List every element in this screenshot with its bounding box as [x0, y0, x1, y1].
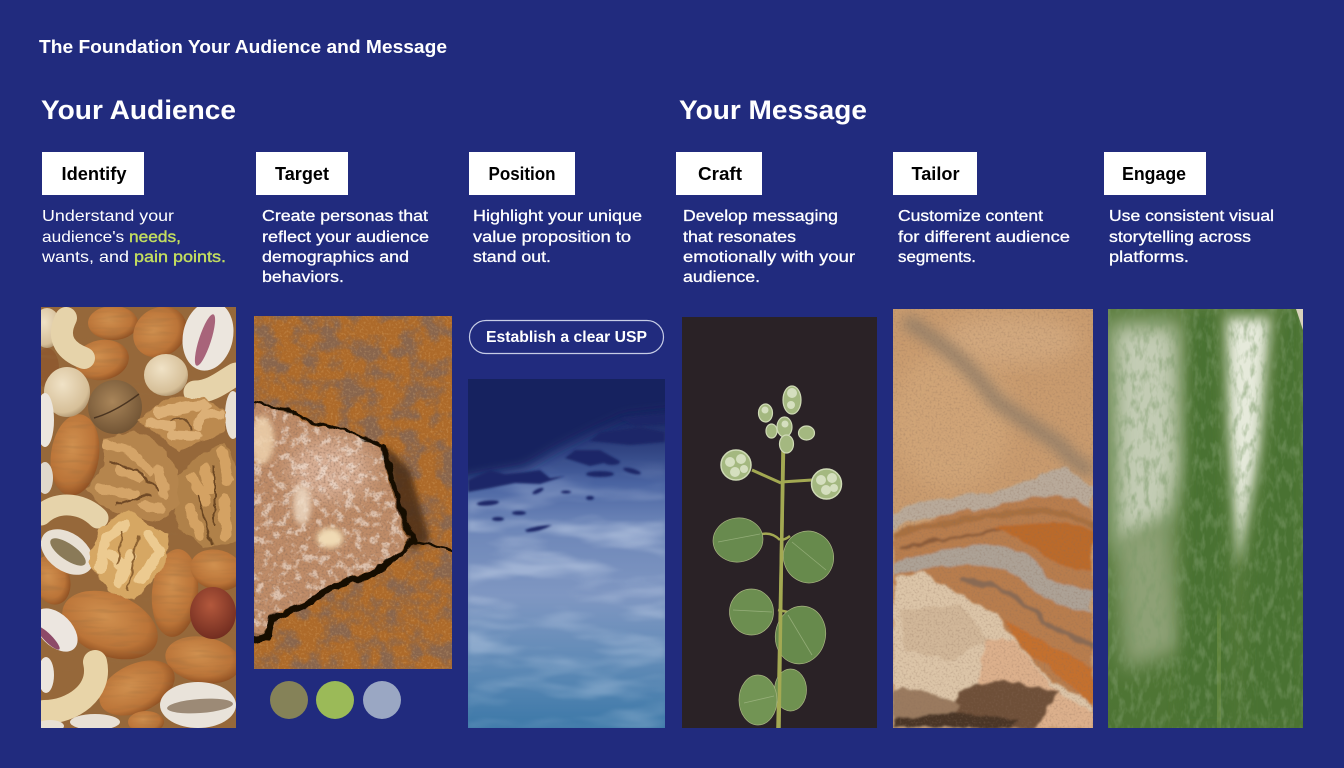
walnuts: [86, 396, 238, 600]
dark deep water: [440, 360, 700, 484]
text: target: demographics and: [262, 249, 409, 266]
leaf veins: [718, 534, 826, 703]
almond grain: [41, 307, 236, 728]
label: tailor: [893, 152, 977, 195]
text: identify: audience's needs,: [42, 229, 181, 246]
text: position: Highlight your unique: [473, 208, 642, 225]
label: identify: [42, 152, 144, 195]
text: engage: platforms.: [1109, 249, 1189, 266]
text: tailor: [898, 208, 1070, 266]
text: target: [262, 208, 429, 286]
text: engage: [1109, 208, 1274, 266]
rust texture: [254, 316, 452, 669]
image panel: leaf: [1108, 309, 1303, 728]
light ripples: [468, 379, 665, 728]
cashews: [41, 318, 236, 712]
text: craft: that resonates: [683, 229, 796, 246]
stem: [752, 450, 812, 728]
text: craft: [683, 208, 856, 286]
pale boulder: [893, 572, 1093, 728]
image panel: plant: [682, 317, 877, 728]
label: tailor: Tailor: [912, 164, 960, 184]
swatch: olive: [270, 681, 308, 719]
callout: establish a clear USP: [470, 320, 664, 354]
text: craft: emotionally with your: [683, 249, 856, 266]
almonds: [41, 307, 236, 728]
rock fragment and crack: [254, 404, 452, 640]
text: identify: Understand your: [42, 208, 175, 225]
water shadow blobs: [468, 414, 665, 532]
text: identify: wants, and pain points.: [41, 249, 226, 266]
label: engage: [1104, 152, 1206, 195]
swatches: [270, 681, 401, 719]
white highlights: [1112, 318, 1270, 670]
dark midrib bands: [1178, 309, 1303, 728]
label: target: [256, 152, 348, 195]
leaf edge: [1296, 309, 1303, 330]
hazelnuts: [33, 308, 236, 639]
stratified bands: [893, 465, 1093, 720]
pistachios: [26, 297, 241, 732]
text: craft: Develop messaging: [683, 208, 838, 225]
text: target: behaviors.: [262, 269, 344, 286]
text: engage: storytelling across: [1109, 229, 1251, 246]
text: position: value proposition to: [473, 229, 631, 246]
text: tailor: Customize content: [898, 208, 1044, 225]
walnut: right cluster: [172, 442, 238, 548]
swatch: blue grey: [363, 681, 401, 719]
rock speckle: [893, 309, 1093, 728]
callout: establish a clear USP: Establish a clear USP: [486, 329, 647, 346]
label: craft: [676, 152, 762, 195]
image panel: mixed nuts: [41, 307, 236, 728]
pale midrib: [1218, 610, 1220, 728]
text: tailor: for different audience: [898, 229, 1070, 246]
upper grey streak: [905, 320, 1093, 470]
walnut: lower golden: [88, 508, 170, 600]
text: craft: audience.: [683, 269, 760, 286]
label: position: Position: [488, 164, 556, 184]
crack shadow: [385, 445, 430, 550]
heading: your message: Your Message: [679, 95, 867, 125]
text: tailor: segments.: [898, 249, 976, 266]
label: craft: Craft: [698, 164, 742, 184]
bud detail: [725, 388, 838, 495]
tan variation: [890, 350, 1010, 490]
text: engage: Use consistent visual: [1109, 208, 1274, 225]
label: identify: Identify: [62, 164, 126, 184]
rock mottling: [250, 400, 414, 640]
text: target: Create personas that: [262, 208, 429, 225]
swatch: green: [316, 681, 354, 719]
label: position: [469, 152, 575, 195]
text: target: reflect your audience: [262, 229, 429, 246]
text: identify: [41, 208, 226, 266]
leaf hair texture: [1108, 309, 1303, 728]
image panel: cracked rock: [250, 316, 452, 669]
heading: your audience: Your Audience: [41, 95, 236, 125]
text: position: [473, 208, 642, 266]
label: engage: Engage: [1122, 164, 1186, 184]
title: The Foundation Your Audience and Message: [39, 37, 447, 57]
flower buds: [721, 386, 842, 499]
image panel: water: [440, 360, 700, 728]
walnut: centre cluster: [86, 430, 178, 522]
leaves: [710, 515, 841, 725]
image panel: layered rock: [890, 309, 1093, 728]
dark rock base: [893, 680, 1058, 728]
label: target: Target: [275, 164, 329, 184]
walnut: upper cluster: [138, 396, 226, 452]
text: position: stand out.: [473, 249, 551, 266]
